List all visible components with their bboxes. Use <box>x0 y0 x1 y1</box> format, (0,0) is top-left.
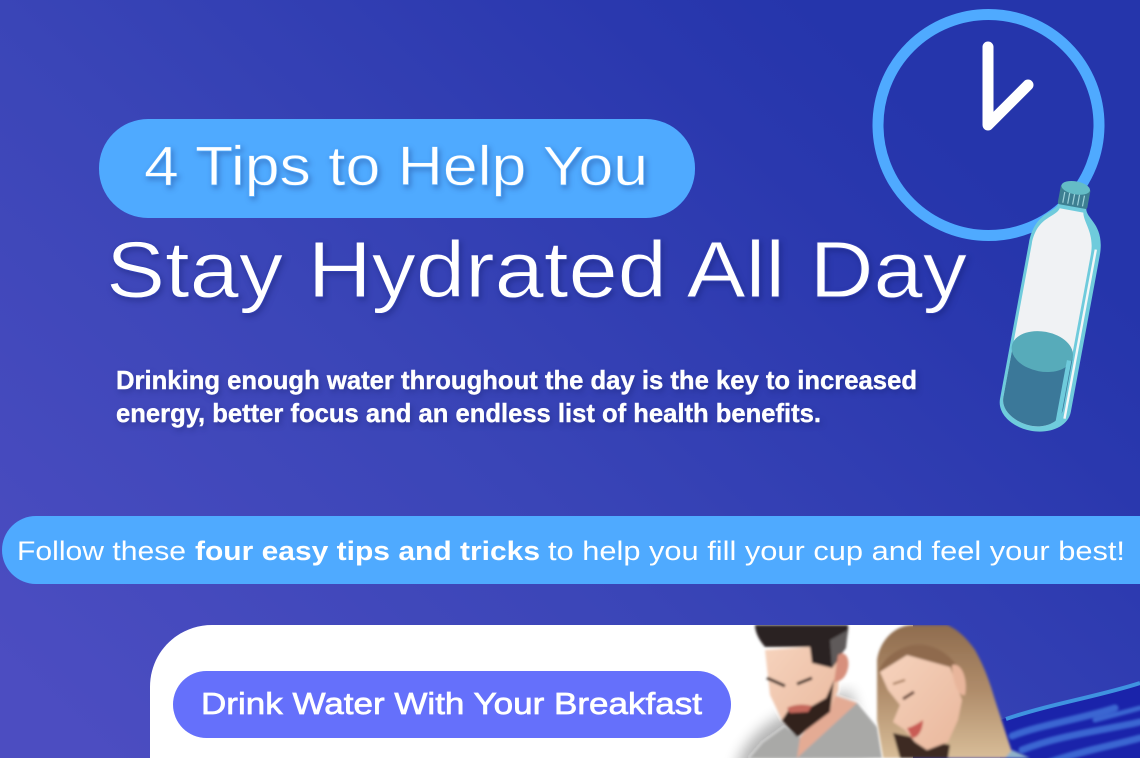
banner: follow these tips: four easy tips and tricks <box>195 536 540 566</box>
intro text: energy, better focus and an endless list of health benefits. <box>116 398 821 428</box>
woman <box>877 625 1030 758</box>
banner: follow these tips: Follow these <box>17 536 186 566</box>
banner: follow these tips: to help you fill your cup and feel your best! <box>548 536 1125 566</box>
man <box>735 625 882 758</box>
panel: tip card <box>150 625 913 758</box>
photo: couple <box>735 625 1030 758</box>
banner: follow these tips <box>2 516 1140 584</box>
wave graphic <box>1000 682 1140 758</box>
intro text <box>116 365 917 428</box>
title: Stay Hydrated All Day <box>106 225 967 314</box>
icon: clock <box>878 14 1099 236</box>
tip heading pill <box>173 671 731 738</box>
badge: 4 Tips to Help You: 4 Tips to Help You <box>144 134 648 197</box>
tip heading pill: Drink Water With Your Breakfast <box>201 686 702 721</box>
icon: water bottle <box>995 175 1112 437</box>
intro text: Drinking enough water throughout the day is the key to increased <box>116 365 917 395</box>
badge: 4 Tips to Help You <box>99 119 695 218</box>
